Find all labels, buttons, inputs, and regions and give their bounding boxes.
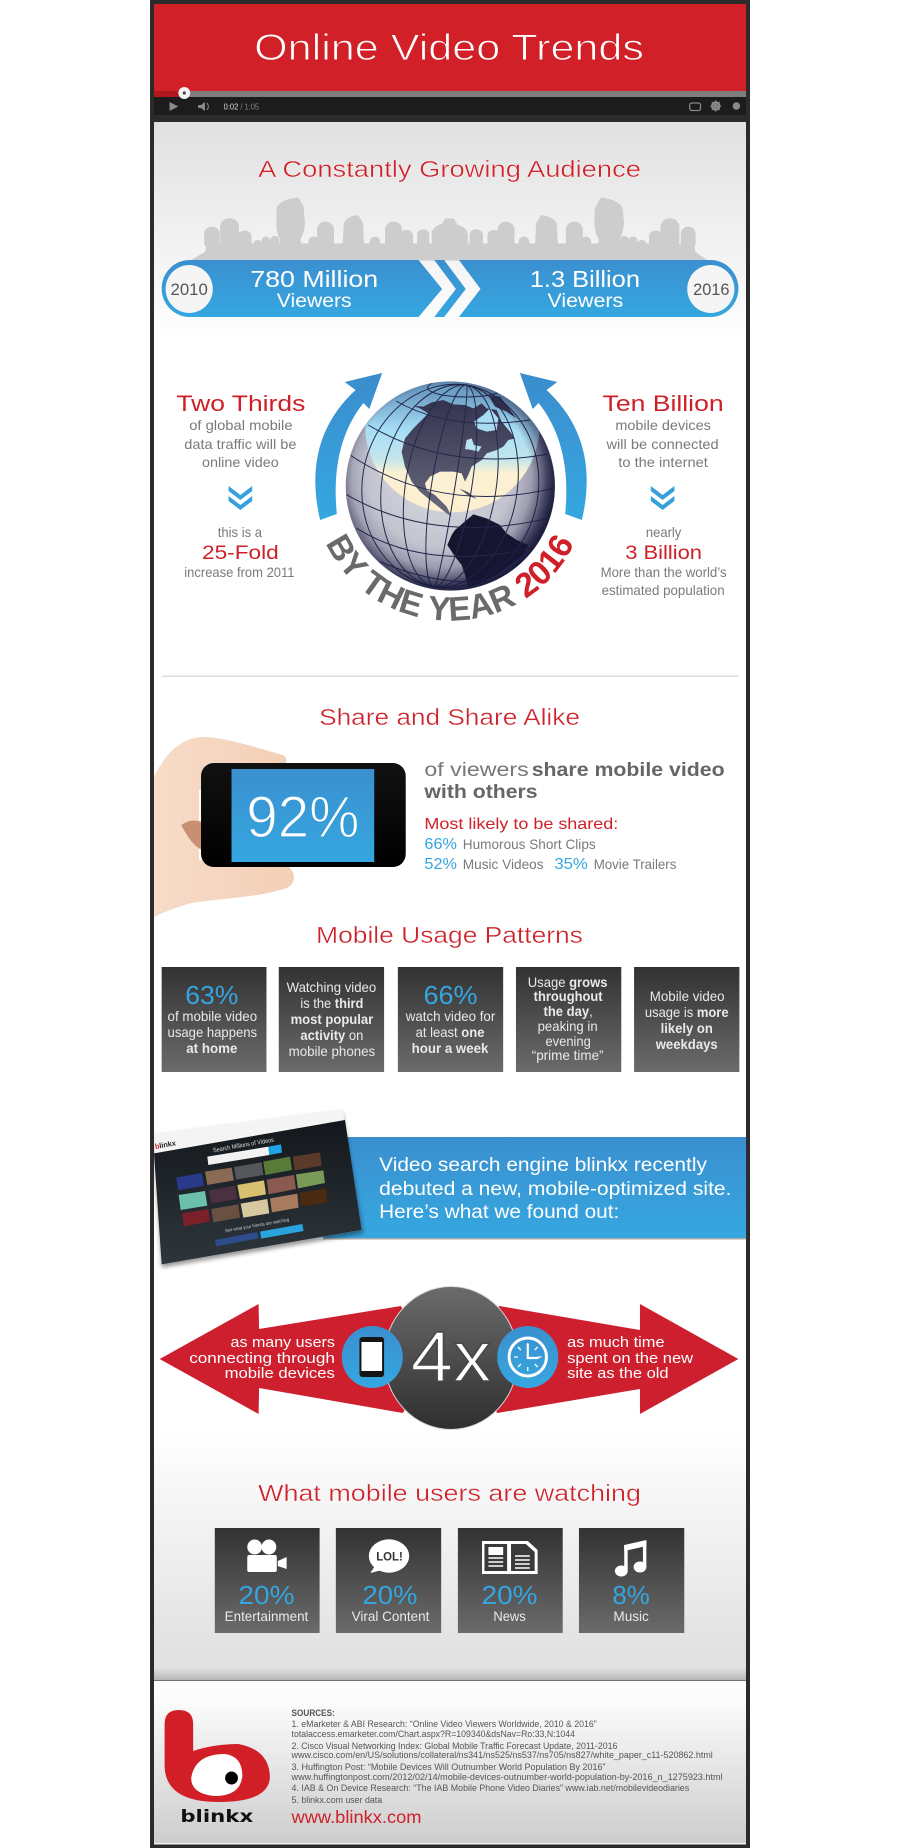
left stat: two thirds: 25-Fold <box>202 542 279 564</box>
share statistics text: Music Videos <box>463 856 544 872</box>
center ball <box>384 1286 518 1430</box>
blue banner: Here’s what we found out: <box>379 1201 619 1223</box>
4x: 4x <box>411 1316 491 1396</box>
hand <box>154 737 294 917</box>
right stat: ten billion: will be connected <box>605 436 719 452</box>
category: entertainment: Entertainment <box>225 1608 308 1624</box>
stat 2010: Viewers <box>277 290 352 312</box>
control bar <box>154 97 746 115</box>
usage box 5: usage is more <box>645 1004 729 1020</box>
category: entertainment: 20% <box>238 1582 295 1610</box>
double red arrow <box>160 1286 738 1430</box>
sources: www.cisco.com/en/US/solutions/collateral/ns341/ns525/ns537/ns705/ns827/white_paper_c11-520862.html <box>291 1749 713 1760</box>
icon: double chevron <box>651 486 674 510</box>
progress knob <box>178 87 190 99</box>
usage box 2: is the third <box>300 995 363 1011</box>
category: entertainment <box>215 1528 320 1633</box>
stat 2010: 780 Million <box>250 266 378 292</box>
right stat: ten billion: estimated population <box>602 582 725 598</box>
year 2010 <box>166 265 213 313</box>
category: music: Music <box>613 1608 649 1624</box>
left stat: two thirds: this is a <box>218 524 262 540</box>
sources: 1. eMarketer & ABI Research: “Online Video Viewers Worldwide, 2010 & 2016” <box>292 1718 597 1729</box>
usage box 5 <box>634 967 739 1072</box>
header: video player <box>154 4 746 115</box>
continent: North America <box>402 395 517 517</box>
heading: mobile usage: Mobile Usage Patterns <box>316 922 583 948</box>
globe edge shading <box>346 381 555 591</box>
sources: 3. Huffington Post: “Mobile Devices Will Outnumber World Population By 2016” <box>292 1761 606 1772</box>
icon: newspaper <box>482 1541 538 1574</box>
category: music: 8% <box>612 1582 650 1610</box>
usage box 1: 63% <box>185 982 238 1010</box>
usage box 2: mobile phones <box>289 1043 375 1059</box>
share statistics text: Most likely to be shared: <box>424 816 618 833</box>
usage box 2: Watching video <box>287 979 376 995</box>
year 2010: 2010 <box>171 281 208 299</box>
left caption <box>189 1335 335 1382</box>
screenshot text: See what your friends are watching <box>225 1217 290 1233</box>
left arrow <box>160 1304 435 1414</box>
globe <box>346 381 555 591</box>
progress played <box>154 91 184 97</box>
usage box 1: of mobile video <box>168 1008 257 1024</box>
year 2016 <box>687 265 734 313</box>
continent: South America <box>447 514 528 587</box>
icon: movie camera <box>247 1540 287 1572</box>
sources <box>291 1707 723 1805</box>
right stat: ten billion: More than the world’s <box>601 564 727 580</box>
usage box 4: the day, <box>544 1003 593 1019</box>
timeline bar: viewers 2010 to 2016 <box>162 260 738 317</box>
icon: phone <box>342 1326 403 1388</box>
website link: www.blinkx.com <box>291 1807 421 1827</box>
phone <box>201 763 406 867</box>
right stat: ten billion: 3 Billion <box>625 542 702 564</box>
right segment <box>459 260 738 317</box>
hand holding phone <box>154 737 406 917</box>
icon: volume <box>198 102 208 111</box>
stat 2016: Viewers <box>547 290 623 312</box>
year 2016: 2016 <box>693 281 730 299</box>
thumbnails <box>176 1152 327 1226</box>
share statistics text: of viewers <box>424 759 529 780</box>
category: viral content <box>336 1528 441 1633</box>
curved label: by the year 2016: BY THE YEAR 2016 <box>326 533 572 621</box>
left stat: two thirds: increase from 2011 <box>184 564 295 580</box>
usage box 1: at home <box>186 1040 238 1056</box>
usage box 5: likely on <box>661 1020 713 1036</box>
sources: totalaccess.emarketer.com/Chart.aspx?R=109340&dsNav=Ro:33,N:1044 <box>292 1728 575 1739</box>
progress bar <box>154 91 746 97</box>
globe grid <box>346 378 553 588</box>
icon: captions <box>690 103 700 110</box>
usage box 2 <box>279 967 384 1072</box>
usage box 4: Usage grows <box>528 974 608 990</box>
icon: double chevron <box>229 486 252 510</box>
screenshot text <box>154 1137 298 1245</box>
right caption: spent on the new <box>567 1351 694 1367</box>
sources: www.huffingtonpost.com/2012/02/14/mobile-devices-outnumber-world-population-by-2016_n_1275923.html <box>291 1771 723 1782</box>
category: music <box>579 1528 684 1633</box>
icon: settings <box>710 100 721 112</box>
92%: 92% <box>246 786 359 850</box>
sign-in buttons <box>215 1224 304 1246</box>
share statistics text: Humorous Short Clips <box>463 836 596 852</box>
share statistics text: 52% <box>424 856 457 873</box>
crowd silhouette <box>190 197 708 261</box>
right stat: ten billion: mobile devices <box>615 417 711 433</box>
stat 2016 <box>530 266 640 312</box>
blue banner <box>323 1137 746 1240</box>
usage box 2: activity on <box>300 1027 363 1043</box>
category: news: News <box>493 1608 526 1624</box>
sources: 2. Cisco Visual Networking Index: Global Mobile Traffic Forecast Update, 2011-2016 <box>292 1740 617 1751</box>
timecode: 0:02 / 1:05 <box>224 102 260 112</box>
website screenshot <box>153 1109 363 1268</box>
icon: music note <box>615 1540 646 1576</box>
usage box 4: evening <box>545 1033 591 1049</box>
right caption <box>567 1335 694 1382</box>
left stat: two thirds: of global mobile <box>189 417 293 433</box>
share statistics text: with others <box>423 781 538 802</box>
left caption: mobile devices <box>225 1366 335 1382</box>
share statistics text: 66% <box>424 836 457 853</box>
usage box 3: watch video for <box>405 1008 496 1024</box>
icon: clock <box>497 1326 558 1388</box>
search bar <box>207 1147 269 1165</box>
heading: share: Share and Share Alike <box>319 704 580 730</box>
usage box 1 <box>162 967 266 1072</box>
usage box 1: usage happens <box>168 1024 257 1040</box>
phone screen <box>232 769 374 862</box>
right stat: ten billion: to the internet <box>618 454 708 470</box>
page frame and body background <box>150 0 750 1848</box>
usage box 2: most popular <box>291 1011 374 1027</box>
heading: audience: A Constantly Growing Audience <box>258 156 641 182</box>
left stat: two thirds: online video <box>202 454 279 470</box>
left stat: two thirds <box>176 391 305 580</box>
arrow: right curved <box>520 373 587 520</box>
share statistics text: Movie Trailers <box>594 856 676 872</box>
right caption: as much time <box>567 1335 665 1351</box>
sources: 4. IAB & On Device Research: “The IAB Mobile Phone Video Diaries” www.iab.net/mobilevideodiaries <box>292 1782 689 1793</box>
sea glow <box>365 382 540 512</box>
blue banner: Video search engine blinkx recently <box>379 1154 707 1176</box>
category: viral content: 20% <box>362 1582 418 1610</box>
category: news: 20% <box>482 1582 538 1610</box>
title banner <box>154 4 746 91</box>
logo mark <box>165 1710 270 1802</box>
icon: LOL speech bubble: LOL! <box>376 1549 403 1564</box>
stat 2016: 1.3 Billion <box>530 266 640 292</box>
arrow: left curved <box>315 373 382 520</box>
middle chevron <box>434 260 466 317</box>
screenshot text: Search Millions of Videos <box>212 1137 274 1154</box>
usage box 3: hour a week <box>412 1040 489 1056</box>
usage box 3: at least one <box>416 1024 485 1040</box>
sources: SOURCES: <box>292 1707 335 1718</box>
blinkx logo <box>165 1710 270 1826</box>
screenshot text: Sign in with Twitter <box>269 1227 298 1236</box>
usage box 4: peaking in <box>538 1018 598 1034</box>
left caption: connecting through <box>189 1351 335 1367</box>
usage box 5: weekdays <box>655 1036 718 1052</box>
title: Online Video Trends <box>254 27 644 68</box>
share statistics text <box>423 759 725 873</box>
screenshot text: blinkx <box>154 1138 177 1151</box>
stat 2010 <box>250 266 378 312</box>
screenshot text: Sign in with Facebook <box>223 1235 256 1245</box>
logo wordmark: blinkx <box>180 1806 253 1826</box>
left caption: as many users <box>231 1335 335 1351</box>
category: news <box>458 1528 563 1633</box>
usage box 3: 66% <box>423 982 478 1010</box>
share statistics text: share mobile video <box>532 759 725 780</box>
sources: 5. blinkx.com user data <box>292 1794 383 1805</box>
right arrow <box>465 1304 738 1414</box>
usage box 4 <box>516 967 621 1072</box>
usage box 3 <box>398 967 503 1072</box>
share statistics text: 35% <box>554 856 588 873</box>
icon: info <box>733 102 740 110</box>
category: viral content: Viral Content <box>352 1608 429 1624</box>
usage box 5: Mobile video <box>650 988 725 1004</box>
heading: what users watch: What mobile users are watching <box>258 1480 641 1506</box>
left stat: two thirds: Two Thirds <box>176 391 305 416</box>
usage box 4: throughout <box>534 988 603 1004</box>
usage box 4: “prime time” <box>532 1047 604 1063</box>
icon: play <box>170 102 178 111</box>
right caption: site as the old <box>567 1366 669 1382</box>
left segment <box>162 260 442 317</box>
right stat: ten billion <box>601 391 727 598</box>
right stat: ten billion: nearly <box>646 524 681 540</box>
blue banner: debuted a new, mobile-optimized site. <box>379 1178 732 1200</box>
right stat: ten billion: Ten Billion <box>603 391 724 416</box>
left stat: two thirds: data traffic will be <box>184 436 297 452</box>
